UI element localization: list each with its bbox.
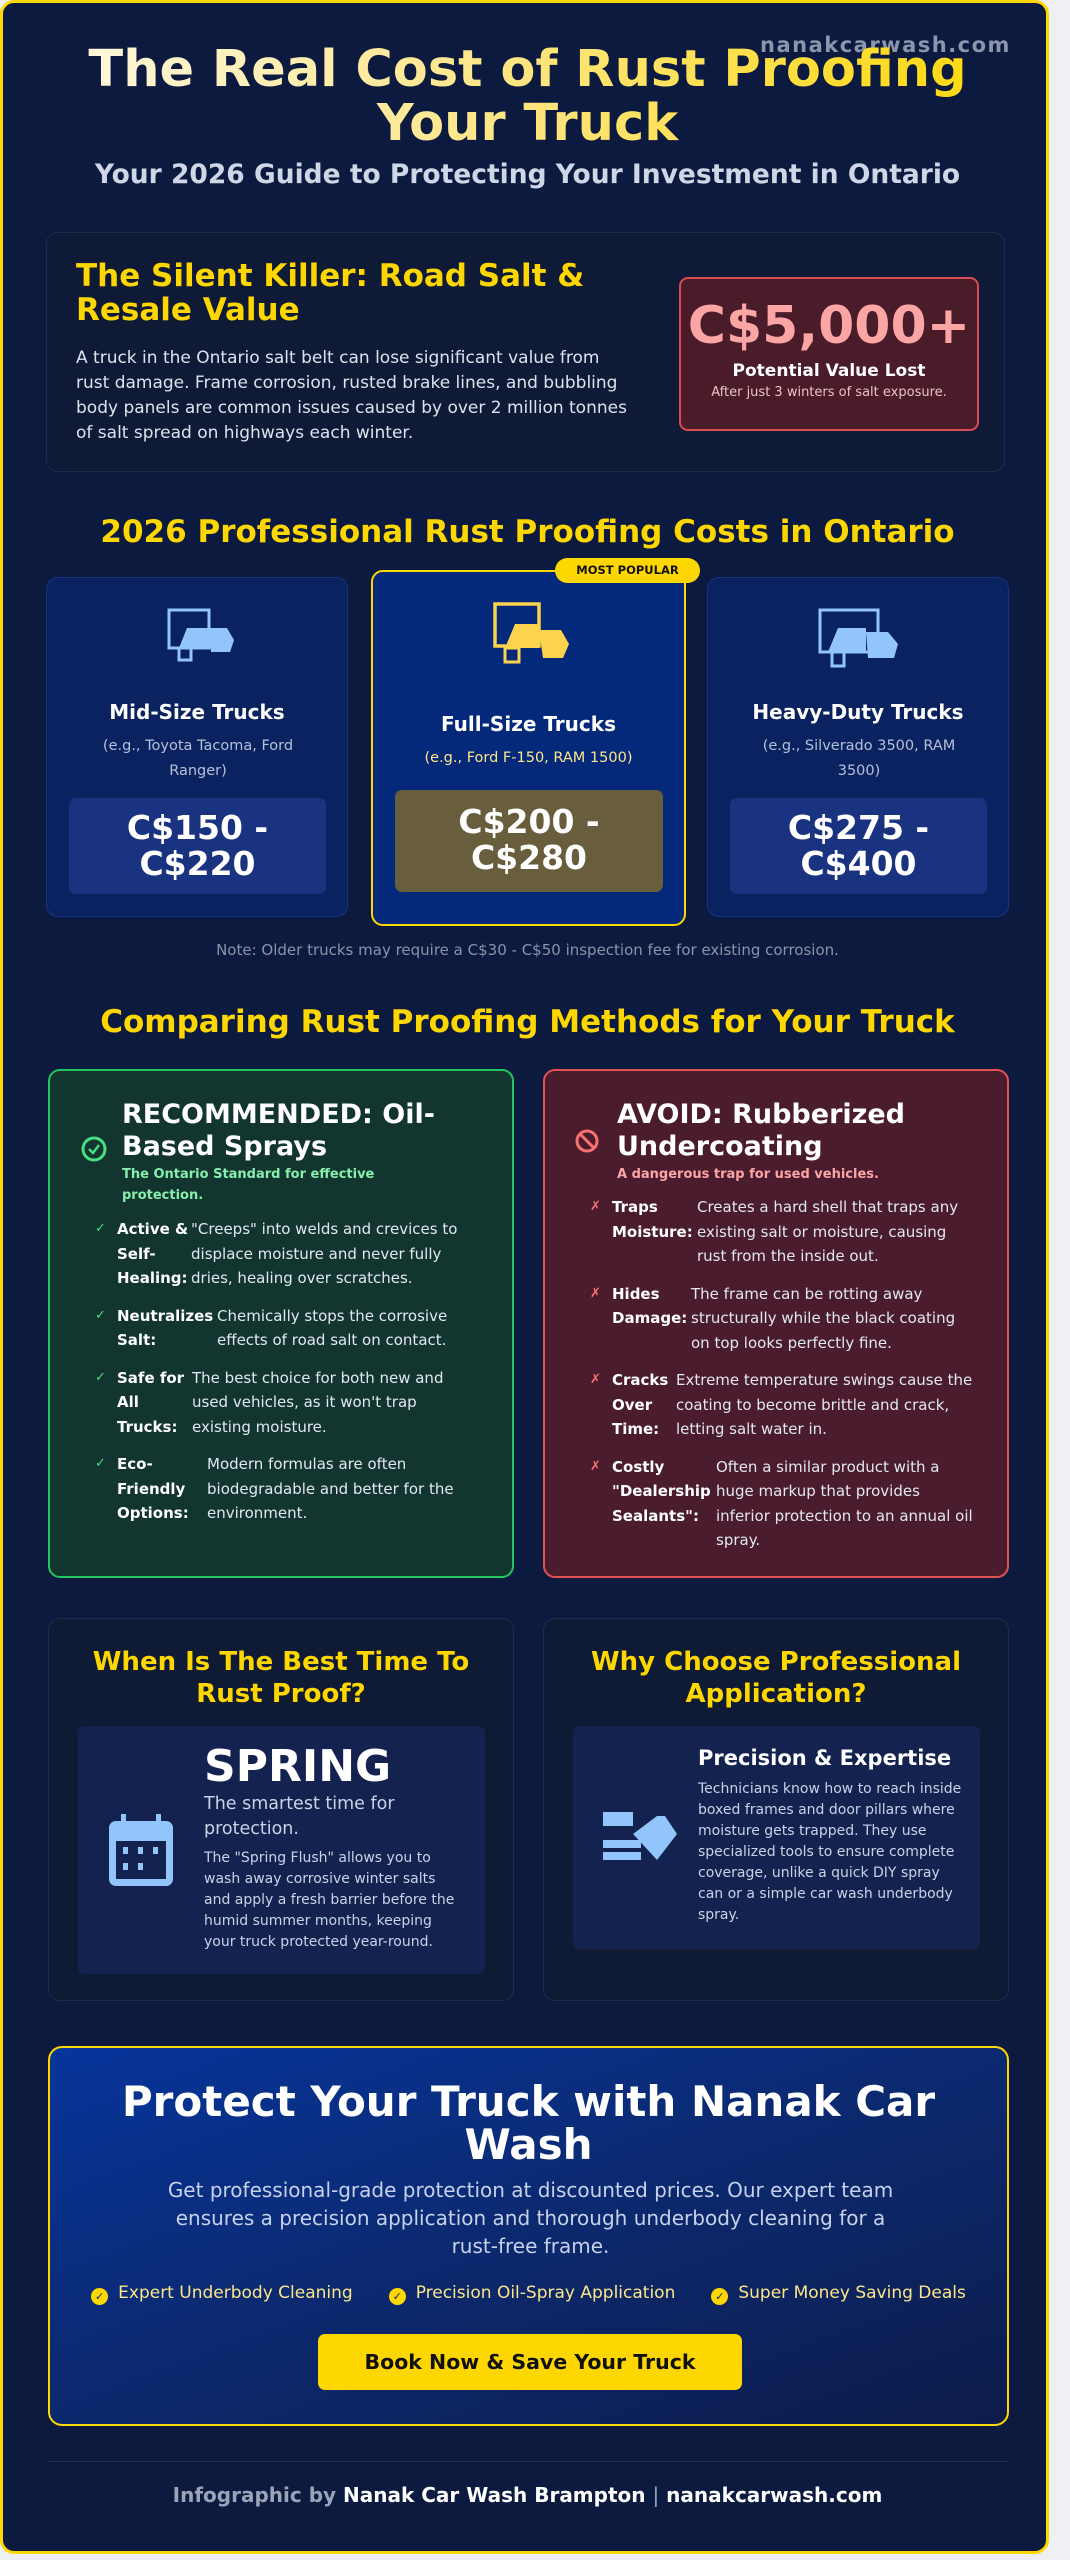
button: Book Now & Save Your Truck bbox=[364, 2350, 696, 2374]
list: Traps Moisture: bbox=[612, 1198, 693, 1240]
list: Creates a hard shell that traps any existing salt or moisture, causing rust from the inside out. bbox=[697, 1198, 958, 1265]
subtitle: Your 2026 Guide to Protecting Your Investment in Ontario bbox=[95, 159, 960, 190]
panel: mid-size: (e.g., Toyota Tacoma, Ford Ranger) bbox=[103, 738, 293, 779]
list: Eco-Friendly Options: bbox=[117, 1455, 189, 1522]
title bbox=[3, 43, 1052, 151]
list: ✓ bbox=[95, 1221, 106, 1236]
panel: recommended: The Ontario Standard for effective protection. bbox=[122, 1167, 374, 1203]
panel: heavy-duty: (e.g., Silverado 3500, RAM 3500) bbox=[763, 738, 955, 779]
list: The best choice for both new and used vehicles, as it won't trap existing moisture. bbox=[192, 1368, 443, 1436]
icon: check circle bbox=[82, 1136, 106, 1162]
list: ✓ bbox=[95, 1370, 106, 1384]
heading: The Silent Killer: Road Salt & Resale Value bbox=[76, 258, 584, 328]
badge: most popular: MOST POPULAR bbox=[576, 563, 679, 577]
price: C$275 - bbox=[788, 808, 929, 847]
heading: Wash bbox=[464, 2120, 593, 2169]
text: SPRING bbox=[204, 1741, 391, 1792]
list: Modern formulas are often biodegradable and better for the environment. bbox=[207, 1455, 454, 1522]
icon: precision bbox=[603, 1812, 677, 1860]
heading: comparing: Comparing Rust Proofing Methods for Your Truck bbox=[100, 1004, 955, 1040]
list: The frame can be rotting away structurally while the black coating on top looks perfectly fine. bbox=[691, 1284, 955, 1352]
heading: AVOID: Rubberized Undercoating bbox=[617, 1099, 905, 1162]
price: C$280 bbox=[471, 838, 587, 877]
price bbox=[395, 790, 663, 892]
button bbox=[318, 2334, 742, 2390]
heading: Why Choose Professional bbox=[591, 1647, 961, 1677]
price bbox=[69, 798, 326, 894]
icon: truck bbox=[818, 608, 898, 668]
label: Full-Size Trucks bbox=[441, 712, 616, 736]
icon: truck bbox=[168, 608, 234, 662]
heading: costs: 2026 Professional Rust Proofing Costs in Ontario bbox=[100, 514, 955, 550]
checks row: ✓ bbox=[95, 2290, 104, 2303]
panel: full-size: (e.g., Ford F-150, RAM 1500) bbox=[424, 750, 632, 766]
badge: most popular bbox=[555, 558, 700, 583]
heading: Protect Your Truck with Nanak Car bbox=[122, 2077, 935, 2126]
price bbox=[730, 798, 987, 894]
checks row: ✓ bbox=[393, 2290, 402, 2303]
list: Often a similar product with a huge markup that provides inferior protection to an annual oil spray. bbox=[716, 1458, 973, 1549]
price: C$200 - bbox=[458, 802, 600, 841]
icon: ban bbox=[576, 1130, 598, 1152]
inner box: Technicians know how to reach inside boxed frames and door pillars where moisture gets trapped. They use specialized tools to ensure complete coverage, unlike a quick DIY spray can or a simple car wash underbody spray. bbox=[698, 1781, 961, 1923]
panel: heavy-duty bbox=[707, 577, 1009, 917]
panel: why professional bbox=[543, 1618, 1009, 2001]
list bbox=[95, 1220, 457, 1522]
label: Mid-Size Trucks bbox=[109, 700, 285, 724]
heading bbox=[93, 1647, 469, 1709]
heading: RECOMMENDED: Oil-Based Sprays bbox=[122, 1099, 435, 1162]
icon: truck bbox=[493, 602, 569, 664]
panel: call to action bbox=[48, 2046, 1009, 2426]
watermark: nanakcarwash.com bbox=[760, 33, 1011, 57]
icon: calendar bbox=[109, 1814, 173, 1886]
callout: value lost: Potential Value Lost bbox=[733, 361, 925, 381]
list: ✓ bbox=[95, 1308, 106, 1322]
inner box bbox=[573, 1726, 980, 1949]
list: ✗ bbox=[590, 1286, 601, 1300]
list: ✗ bbox=[590, 1458, 601, 1474]
list: "Creeps" into welds and crevices to displace moisture and never fully dries, healing over scratches. bbox=[191, 1220, 457, 1287]
list: Chemically stops the corrosive effects of road salt on contact. bbox=[217, 1306, 447, 1349]
text block: A truck in the Ontario salt belt can lose significant value from rust damage. Frame corrosion, rusted brake lines, and bubbling body panels are common issues caused by over 2 million tonnes of salt spread on highways each winter. bbox=[76, 348, 627, 443]
list: Costly "Dealership Sealants": bbox=[612, 1458, 711, 1524]
callout: value lost: C$5,000+ bbox=[688, 296, 970, 356]
list: Cracks Over Time: bbox=[612, 1371, 668, 1438]
panel: avoid bbox=[543, 1069, 1009, 1578]
price: C$400 bbox=[800, 844, 917, 883]
panel: full-size bbox=[371, 570, 686, 926]
text: Precision & Expertise bbox=[698, 1746, 951, 1770]
title: Your Truck bbox=[377, 94, 678, 153]
heading: When Is The Best Time To bbox=[93, 1647, 469, 1677]
panel: avoid: A dangerous trap for used vehicles. bbox=[617, 1167, 879, 1182]
footer: Infographic by Nanak Car Wash Brampton | nanakcarwash.com bbox=[173, 2483, 882, 2507]
checks row: Super Money Saving Deals bbox=[738, 2283, 966, 2303]
heading bbox=[122, 2077, 935, 2169]
list: Extreme temperature swings cause the coating to become brittle and crack, letting salt water in. bbox=[676, 1371, 972, 1438]
list: Hides Damage: bbox=[612, 1284, 687, 1327]
list bbox=[590, 1198, 973, 1549]
callout: value lost bbox=[679, 277, 979, 431]
inner box bbox=[78, 1726, 485, 1974]
price: C$220 bbox=[139, 844, 256, 883]
panel: best time bbox=[48, 1618, 514, 2001]
label: Heavy-Duty Trucks bbox=[752, 700, 964, 724]
checks row: Expert Underbody Cleaning bbox=[118, 2283, 353, 2303]
list: Active & Self-Healing: bbox=[117, 1220, 188, 1287]
note: Note: Older trucks may require a C$30 - C$50 inspection fee for existing corrosion. bbox=[216, 941, 839, 959]
list: ✗ bbox=[590, 1372, 601, 1387]
price: C$150 - bbox=[127, 808, 268, 847]
panel: silent killer bbox=[46, 232, 1005, 472]
title: The Real Cost of Rust Proofing bbox=[88, 40, 967, 99]
list: ✓ bbox=[95, 1456, 106, 1471]
panel: mid-size bbox=[46, 577, 348, 917]
heading: Rust Proof? bbox=[196, 1679, 366, 1709]
text: Get professional-grade protection at discounted prices. Our expert team ensures a precision application and thorough underbody cleaning for a rust-free frame. bbox=[168, 2178, 893, 2258]
checks row: Precision Oil-Spray Application bbox=[416, 2283, 675, 2303]
checks row: ✓ bbox=[715, 2290, 724, 2303]
list: Neutralizes Salt: bbox=[117, 1306, 213, 1349]
inner box: The "Spring Flush" allows you to wash away corrosive winter salts and apply a fresh barrier before the humid summer months, keeping your truck protected year-round. bbox=[204, 1850, 454, 1950]
checks row bbox=[91, 2283, 966, 2305]
list: Safe for All Trucks: bbox=[117, 1368, 184, 1436]
heading bbox=[591, 1647, 961, 1709]
panel: recommended bbox=[48, 1069, 514, 1578]
list: ✗ bbox=[590, 1199, 601, 1214]
callout: value lost: After just 3 winters of salt exposure. bbox=[711, 385, 947, 400]
inner box: The smartest time for protection. bbox=[204, 1794, 395, 1839]
heading: Application? bbox=[686, 1679, 866, 1709]
